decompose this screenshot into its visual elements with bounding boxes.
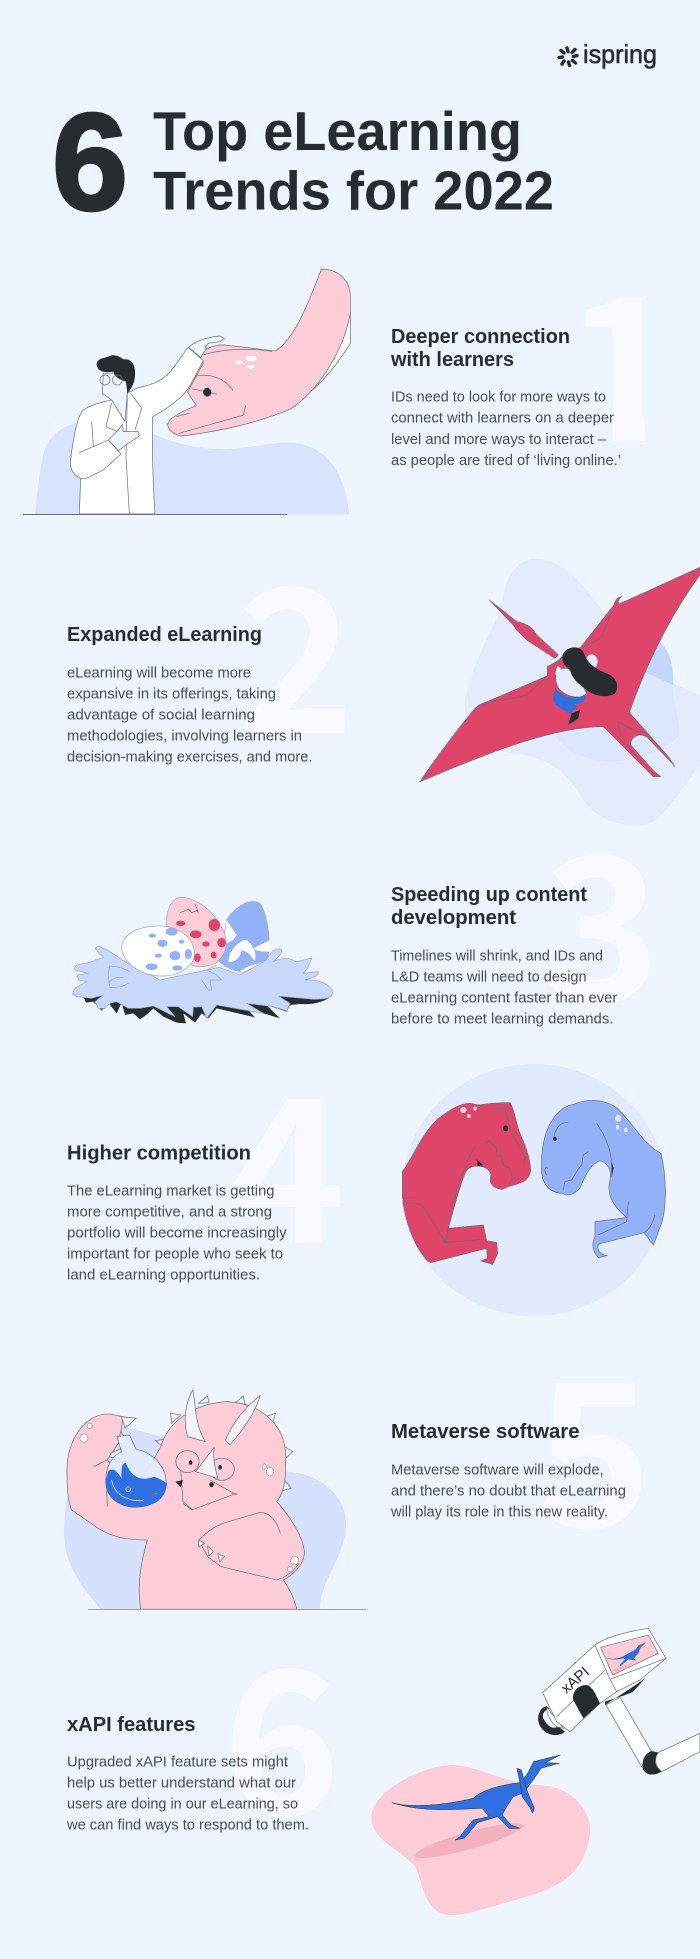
body text: Metaverse software will explode, (391, 1461, 604, 1478)
body text (66, 1754, 309, 1834)
big number 5: 5 (534, 1295, 653, 1585)
heading (391, 884, 587, 929)
title (52, 86, 554, 240)
big number 6: 6 (222, 1583, 341, 1873)
panel: trend 4 (67, 1011, 666, 1316)
body text: L&D teams will need to design (391, 969, 587, 986)
illustration: two dinosaurs facing off (402, 1064, 666, 1316)
heading: Speeding up content (391, 884, 587, 906)
heading: with learners (390, 349, 514, 371)
panel: trend 1 (23, 209, 683, 515)
panel: trend 3 (73, 769, 661, 1059)
body text: portfolio will become increasingly (67, 1225, 287, 1242)
body text: advantage of social learning (67, 707, 255, 724)
body text (391, 389, 621, 469)
body text: eLearning content faster than ever (391, 990, 617, 1007)
heading: Metaverse software (391, 1421, 580, 1443)
body text: eLearning will become more (67, 665, 251, 682)
body text: expansive in its offerings, taking (67, 686, 276, 703)
body text: and there’s no doubt that eLearning (391, 1482, 626, 1499)
body text (67, 1183, 287, 1284)
body text (391, 948, 617, 1028)
body text: connect with learners on a deeper (391, 410, 614, 427)
heading: development (391, 907, 516, 929)
logo: ispring: ispring (583, 39, 657, 69)
body text: important for people who seek to (67, 1246, 283, 1263)
body text: decision-making exercises, and more. (67, 749, 312, 766)
heading: Expanded eLearning (67, 624, 262, 646)
big number 1: 1 (564, 209, 683, 499)
heading: Higher competition (67, 1142, 251, 1164)
body text: IDs need to look for more ways to (391, 389, 606, 406)
body text: as people are tired of ‘living online.’ (391, 452, 621, 469)
title: Trends for 2022 (153, 160, 554, 222)
body text: methodologies, involving learners in (67, 728, 302, 745)
illustration: camera watching a raptor (371, 1628, 700, 1915)
body text (67, 665, 312, 766)
panel: trend 6 (66, 1583, 700, 1915)
big number 3: 3 (543, 769, 661, 1059)
body text: we can find ways to respond to them. (66, 1817, 309, 1834)
body text: will play its role in this new reality. (390, 1503, 608, 1520)
heading: Deeper connection (391, 326, 570, 348)
illustration: person riding pterosaur (420, 558, 700, 826)
panel: trend 2 (67, 501, 700, 826)
body text: help us better understand what our (67, 1775, 296, 1792)
illustration: eggs in a nest (73, 897, 333, 1023)
body text: level and more ways to interact – (391, 431, 607, 448)
heading: xAPI features (67, 1714, 196, 1736)
heading (390, 326, 570, 371)
body text: before to meet learning demands. (391, 1011, 613, 1028)
big number 2: 2 (237, 501, 355, 791)
xAPI label: xAPI (558, 1664, 593, 1697)
body text: more competitive, and a strong (67, 1204, 272, 1221)
illustration: triceratops with flask (64, 1390, 366, 1610)
body text: The eLearning market is getting (67, 1183, 274, 1200)
title: Top eLearning (153, 100, 522, 162)
body text (390, 1461, 626, 1520)
body text: land eLearning opportunities. (67, 1267, 260, 1284)
body text: Timelines will shrink, and IDs and (391, 948, 603, 965)
title: 6 (52, 86, 128, 240)
body text: Upgraded xAPI feature sets might (67, 1754, 289, 1771)
body text: users are doing in our eLearning, so (67, 1796, 298, 1813)
panel: trend 5 (64, 1295, 653, 1610)
illustration: scientist petting dinosaur (23, 269, 350, 515)
big number 4: 4 (227, 1011, 346, 1301)
